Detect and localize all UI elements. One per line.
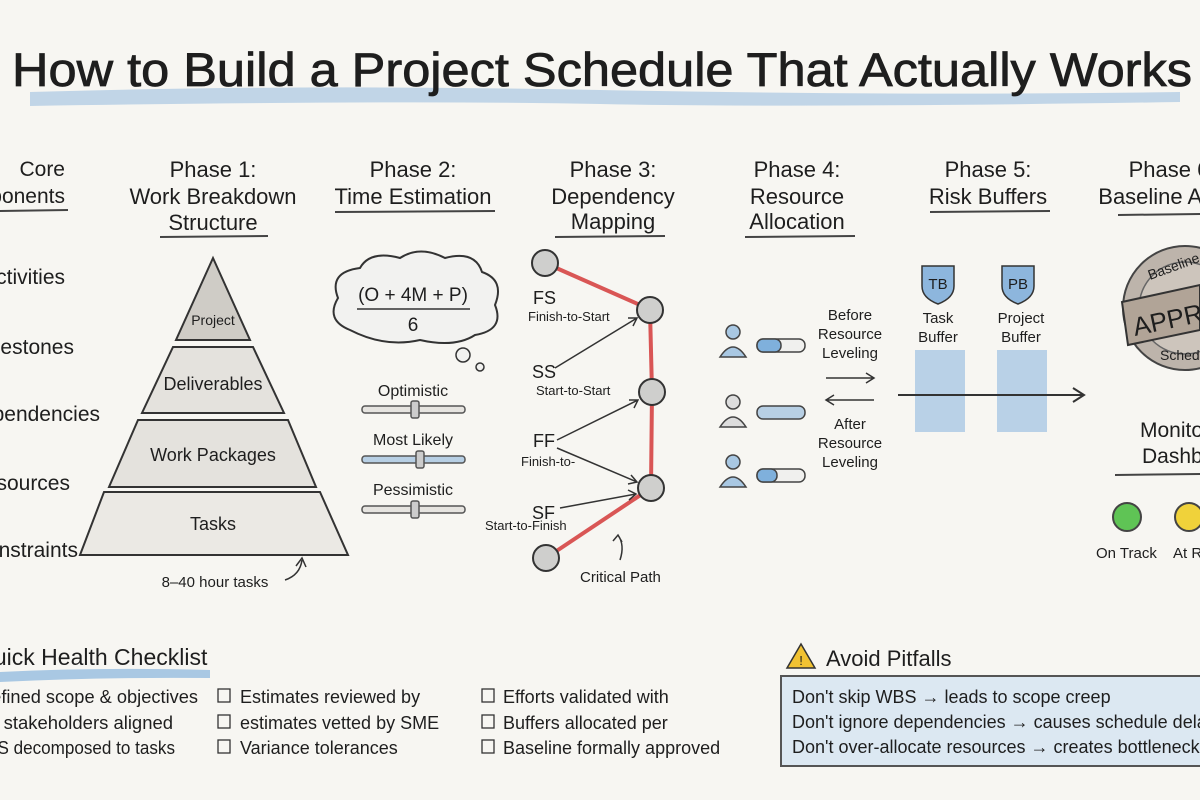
panel: core components [0, 158, 100, 562]
shields [922, 266, 1034, 304]
panel: phase 1 WBS: Tasks [190, 514, 236, 534]
panel: phase 5 risk buffers: Task [923, 310, 954, 327]
panel: phase 1 WBS: Structure [168, 210, 258, 235]
panel: phase 3 dependency mapping [485, 157, 675, 586]
dependency labels: SS [532, 362, 556, 382]
dependency labels [485, 288, 661, 586]
panel: phase 4 resource allocation: Before [828, 307, 872, 324]
dependency labels: Start-to-Finish [485, 518, 567, 533]
icon: warning: ! [799, 653, 803, 668]
panel: phase 1 WBS: Phase 1: [170, 157, 256, 182]
status lights [1113, 503, 1141, 531]
panel: phase 5 risk buffers: Buffer [918, 329, 958, 346]
panel: phase 1 WBS: Work Breakdown [129, 184, 297, 209]
sliders: Most Likely [373, 432, 453, 449]
panel: phase 5 risk buffers: Buffer [1001, 329, 1041, 346]
panel: phase 1 WBS: Deliverables [163, 374, 263, 394]
panel: core components: Core [19, 158, 65, 181]
cloud formula: (O + 4M + P) [358, 285, 468, 306]
panel: phase 4 resource allocation: Leveling [822, 345, 878, 362]
panel: phase 4 resource allocation: Resource [818, 435, 882, 452]
panel: avoid pitfalls: Don't skip WBS → leads to scope creep [792, 687, 1111, 707]
panel: avoid pitfalls: Don't over-allocate resources → creates bottlenecks [792, 737, 1200, 757]
dependency labels: Critical Path [580, 569, 661, 586]
cloud formula [334, 252, 498, 371]
panel: phase 4 resource allocation: Resource [750, 184, 844, 209]
approval seal [1122, 246, 1200, 370]
dependency labels: FS [533, 288, 556, 308]
sliders: Optimistic [378, 383, 448, 400]
panel: phase 4 resource allocation: Resource [818, 326, 882, 343]
panel: phase 5 risk buffers: TB [928, 276, 948, 293]
panel: phase 1 WBS: Work Packages [150, 445, 276, 465]
panel: avoid pitfalls: Avoid Pitfalls [826, 646, 952, 671]
panel: phase 4 resource allocation: After [834, 416, 866, 433]
panel: health checklist: Buffers allocated per [503, 713, 668, 733]
panel: phase 6 baseline: On Track [1096, 545, 1157, 562]
dependency labels: Finish-to-Start [528, 309, 610, 324]
panel: phase 5 risk buffers: Project [998, 310, 1045, 327]
panel: health checklist: Variance tolerances [240, 738, 398, 758]
panel: phase 4 resource allocation: Leveling [822, 454, 878, 471]
panel: health checklist: Efforts validated with [503, 687, 669, 707]
sliders [373, 383, 453, 499]
panel: phase 2 time estimation: Phase 2: [370, 157, 456, 182]
panel: phase 2 time estimation [334, 157, 498, 518]
dependency labels: Start-to-Start [536, 383, 611, 398]
panel: health checklist: Baseline formally approved [503, 738, 720, 758]
panel: phase 4 resource allocation [720, 157, 882, 487]
panel: health checklist: estimates vetted by SME [240, 713, 439, 733]
panel: phase 4 resource allocation: Phase 4: [754, 157, 840, 182]
panel: phase 1 WBS: Project [191, 312, 235, 328]
approval seal: Baseline [1146, 249, 1200, 283]
people icons with bars [720, 325, 805, 487]
panel: phase 5 risk buffers: PB [1008, 276, 1028, 293]
pyramid [80, 258, 348, 555]
panel: phase 1 WBS: 8–40 hour tasks [162, 574, 268, 591]
nodes [532, 250, 665, 571]
panel: phase 2 time estimation: Time Estimation [335, 184, 491, 209]
panel: phase 5 risk buffers: Risk Buffers [929, 184, 1047, 209]
icon: warning [787, 644, 815, 668]
panel: health checklist: Estimates reviewed by [240, 687, 420, 707]
panel: phase 4 resource allocation: Allocation [749, 209, 845, 234]
panel: phase 3 dependency mapping: Mapping [571, 209, 655, 234]
dependency labels: Finish-to- [521, 454, 575, 469]
panel: phase 3 dependency mapping: Phase 3: [570, 157, 656, 182]
panel: phase 3 dependency mapping: Dependency [551, 184, 675, 209]
panel: phase 5 risk buffers: Phase 5: [945, 157, 1031, 182]
panel: phase 6 baseline [1096, 157, 1200, 562]
title: How to Build a Project Schedule That Actually Works [12, 43, 1192, 96]
dependency labels: FF [533, 431, 555, 451]
critical path lines [545, 263, 652, 558]
panel: avoid pitfalls [781, 644, 1200, 766]
cloud formula: 6 [408, 315, 418, 336]
panel: health checklist [0, 644, 720, 758]
sliders: Pessimistic [373, 482, 453, 499]
panel: phase 1 WBS [80, 157, 348, 591]
dependency labels: SF [532, 503, 555, 523]
panel: phase 5 risk buffers [898, 157, 1084, 432]
